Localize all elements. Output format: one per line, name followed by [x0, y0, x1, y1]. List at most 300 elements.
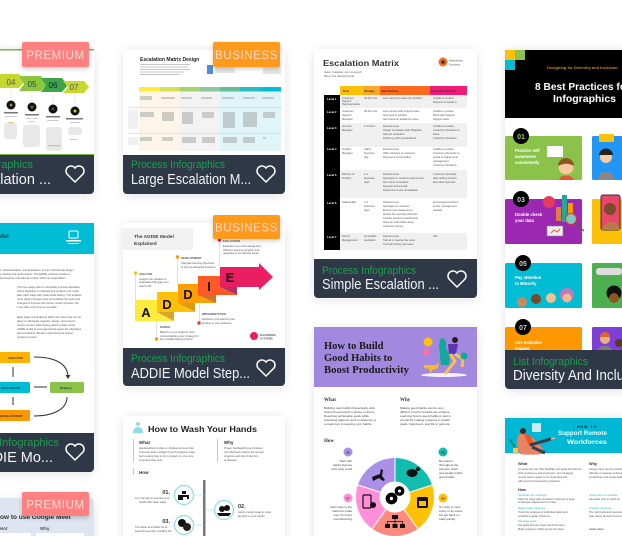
- what and why: will help companies achieve: [589, 471, 622, 475]
- stage labels: IMPLEMENTATION: [202, 312, 226, 316]
- escalation table: Review issue: [383, 172, 399, 176]
- card: premium bottom left: ow to use Google Meet: [0, 514, 72, 521]
- chevron steps: 05: [28, 80, 37, 89]
- what and why: Handwashing is often a mindless process that: [139, 446, 194, 450]
- escalation table: Request to speak to: [433, 100, 457, 104]
- escalation table: needed: [433, 208, 442, 212]
- escalation table: Contact account coordinators: [383, 216, 419, 220]
- badge: business: [213, 42, 280, 67]
- card: how to wash your hands: How to Wash Your Hands: [148, 424, 257, 434]
- escalation table: Work with Support: [433, 113, 455, 117]
- card: how to wash your hands: [123, 416, 285, 536]
- escalation table: 1-3: [364, 200, 368, 204]
- escalation table: Customer threatens to: [433, 128, 460, 132]
- model text: e training and performance. The ADDIE method provides a: [0, 272, 70, 276]
- what and why: Set aside time to catch up: [589, 497, 620, 501]
- card: ADDIE model steps: [123, 223, 285, 387]
- badge: premium: [22, 492, 89, 516]
- card: build good habits: Boost Productivity: [324, 365, 410, 376]
- card: ADDIE model left: del: [0, 234, 9, 240]
- step markers: [344, 448, 448, 502]
- icon: soap: [133, 422, 143, 433]
- escalation table: with raising concern: [433, 176, 457, 180]
- stage labels: effective learning program that: [223, 248, 260, 252]
- escalation table: Director of: [342, 172, 355, 176]
- card: support remote workforces: [505, 418, 622, 536]
- footer: Process Infographics: [131, 353, 225, 365]
- footer: [123, 348, 285, 386]
- what and why: Set goals that are clear and fit the team.: [518, 523, 566, 527]
- logo: Solutions: [449, 62, 461, 66]
- ADDIE staircase arrow: D: [162, 297, 172, 312]
- stage labels: Evaluate if you have designed a: [223, 244, 262, 248]
- escalation table: Consider hiring new team: [383, 242, 414, 246]
- step text: Be patient: [439, 459, 453, 463]
- tile 03: 03: [517, 197, 525, 204]
- escalation table: Timings: [364, 89, 375, 93]
- what and why: How: [324, 439, 334, 444]
- card: support remote workforces: Workforces: [567, 439, 607, 446]
- what and why: How: [139, 470, 149, 475]
- steps timeline: Turn the tap on and wet your: [135, 496, 169, 500]
- tile 05: Pay attention: [515, 275, 542, 280]
- escalation table: Support: [342, 113, 352, 117]
- step text: but get back on: [439, 513, 460, 517]
- escalation table: Senior: [342, 234, 350, 238]
- card: simple escalation matrix: [314, 49, 477, 299]
- what and why: Proper handwashing techniques: [224, 446, 263, 450]
- chevron steps: 07: [70, 83, 79, 92]
- footer: List Infographics: [513, 356, 588, 368]
- badge: premium: PREMIUM: [26, 500, 85, 512]
- what and why: or disease.: [224, 458, 237, 462]
- model text: changes to improve the course content process, but: [17, 301, 79, 305]
- escalation table: Level 5: [327, 173, 337, 177]
- what and why: goals, happiness, and life in general.: [400, 422, 450, 426]
- model text: after each stage with small-scale testing. This enables: [17, 293, 82, 297]
- escalation table: Ensure new measures to: [383, 208, 413, 212]
- escalation table: senior management: [433, 204, 457, 208]
- escalation table: Apologize to customer and ensure: [383, 176, 424, 180]
- step text: habits that are: [333, 463, 352, 467]
- steps timeline: all parts of your hands.: [238, 514, 265, 518]
- what and why: Why: [400, 398, 411, 403]
- tile 08: [592, 327, 622, 357]
- stage labels: DEVELOPMENT: [181, 256, 202, 260]
- stage labels: ANALYSIS: [139, 272, 153, 276]
- steps timeline: hands with clean water.: [139, 500, 167, 504]
- flow diagram: EVALUATION: [1, 386, 20, 390]
- what and why: crucial for making progress in health,: [400, 418, 451, 422]
- step markers: 01: [346, 450, 350, 454]
- tile 07: 07: [519, 325, 527, 332]
- tile 01: [505, 128, 582, 180]
- ADDIE staircase arrow: I: [207, 279, 211, 294]
- illustration: runner: [421, 337, 468, 377]
- model text: taken to effectively organize, design, and present: [17, 319, 76, 323]
- step text: sure it's never: [333, 513, 352, 517]
- card: simple escalation matrix: Escalation Matrix: [323, 59, 400, 68]
- step text: Add notes to the: [330, 505, 352, 509]
- escalation table: Request second call: [383, 184, 408, 188]
- icon: gears: [388, 488, 403, 502]
- what and why: Learning how to keep habits in tact is: [400, 414, 451, 418]
- tile 07: images: [515, 346, 530, 351]
- card: simple escalation matrix: files to the desired format: [324, 74, 354, 78]
- what and why: What: [139, 440, 150, 445]
- step text: throughout the: [439, 463, 459, 467]
- escalation table: resolution: [364, 238, 376, 242]
- escalation table: Customer persisted: [433, 172, 457, 176]
- tile 02: [592, 134, 622, 180]
- escalation table: Talk all to resolve the issue: [383, 238, 416, 242]
- stage labels: understand the gaps you: [139, 280, 169, 284]
- what and why: both employees and employers, but managing: [518, 471, 574, 475]
- model text: where feedback is collected and revisions are made: [17, 289, 79, 293]
- escalation table: Offer solutions to customer: [383, 151, 415, 155]
- logo: [250, 332, 276, 340]
- card: large escalation matrix: [123, 50, 285, 194]
- step text: track quickly: [439, 517, 456, 521]
- escalation table: Customer: [342, 109, 354, 113]
- flow diagram: DEVELOPMENT: [0, 414, 23, 418]
- card: support remote workforces: HOW TO: [577, 425, 597, 429]
- escalation table: Stakeholder: [342, 200, 356, 204]
- escalation table: [324, 86, 467, 250]
- stage labels: DESIGN: [160, 325, 170, 329]
- model text: The Five stage path to continually improve education: [17, 285, 80, 289]
- card: large escalation matrix: Escalation Matrix Design: [140, 57, 199, 63]
- tile 01: Practice self: [515, 148, 540, 153]
- card: premium bottom left: [0, 498, 94, 536]
- escalation table: business: [364, 204, 375, 208]
- escalation table: Customer: [342, 96, 354, 100]
- escalation table: day: [364, 155, 369, 159]
- escalation table: 30-45 mins: [364, 109, 378, 113]
- stage labels: to the pre-designed structure: [181, 265, 216, 269]
- escalation table: Review issue: [383, 147, 399, 151]
- logo: Networking: [449, 58, 463, 62]
- card: diversity and inclusion: Infographics: [553, 93, 616, 105]
- what and why: [518, 462, 622, 531]
- escalation table: Customer threatens: [433, 163, 457, 167]
- stage labels: Integrate learning objectives: [181, 261, 215, 265]
- what and why: How: [518, 488, 526, 492]
- escalation table: Review issue: [383, 234, 399, 238]
- badge: premium: [22, 42, 89, 67]
- footer: [0, 154, 94, 194]
- escalation table: Unable to resolve: [433, 96, 454, 100]
- model text: and constraints will aid in optimizing the course: [17, 331, 74, 335]
- steps timeline: 02.: [238, 504, 246, 510]
- escalation table: Level 2: [327, 110, 337, 114]
- step text: [330, 459, 463, 521]
- escalation table: Half a: [364, 147, 372, 151]
- escalation table: Product: [342, 147, 352, 151]
- escalation table: Executive Sponsor: [433, 180, 456, 184]
- escalation table: Level 6: [327, 201, 337, 205]
- what and why: schedule regular check-ins.: [518, 514, 551, 518]
- steps timeline: least 20 seconds, including the: [135, 529, 172, 533]
- what and why: A remote job can offer flexibility and great benefits for: [518, 467, 581, 471]
- flow diagram: Delivery: [60, 386, 72, 390]
- timeline markers: [6, 90, 80, 116]
- what and why: Why: [589, 462, 598, 466]
- footer: [505, 350, 622, 389]
- escalation table: Support: [342, 99, 352, 103]
- ADDIE staircase arrow: D: [183, 287, 193, 302]
- step text: Start with: [339, 459, 352, 463]
- segment icons: [363, 467, 428, 528]
- step text: a day or an event,: [439, 509, 463, 513]
- escalation table: Manager: [342, 151, 353, 155]
- footer: Large Escalation M...: [131, 172, 251, 188]
- card: support remote workforces: Support Remote: [558, 430, 607, 437]
- escalation table: customer journey: [383, 224, 404, 228]
- stage labels: product to your audience: [202, 321, 232, 325]
- steps timeline: [135, 480, 271, 536]
- what and why: remote teams needs to be organized and: [518, 475, 568, 479]
- badge: premium: PREMIUM: [26, 50, 85, 62]
- ADDIE staircase arrow: A: [141, 305, 151, 320]
- what and why: difficult, but the benefits are endless.: [400, 410, 450, 414]
- escalation table: speak to higher-level: [433, 155, 458, 159]
- card: build good habits: [314, 327, 477, 536]
- what and why: important than ever.: [139, 458, 163, 462]
- escalation table: Immediate: [364, 234, 377, 238]
- chevron steps: [0, 74, 89, 93]
- tile 05: 05: [519, 261, 527, 268]
- escalation table: Account: [342, 124, 352, 128]
- flow diagram: [0, 352, 84, 421]
- tile 04: [592, 195, 622, 244]
- escalation table: Document conversation: [383, 155, 412, 159]
- stage labels: Based on your analysis, start: [160, 330, 195, 334]
- illustration: person with laptop: [509, 423, 555, 455]
- escalation table: Ideal Method: [381, 89, 398, 93]
- what and why: employees aligned and on track.: [518, 500, 557, 504]
- escalation table: days: [364, 208, 370, 212]
- badge: business: [213, 215, 280, 239]
- matrix table: [128, 87, 281, 151]
- tile 07: Use Inclusive: [515, 340, 542, 345]
- card: simple escalation matrix: Issue: Customer can not export: [324, 70, 362, 74]
- step text: habit but make: [332, 509, 352, 513]
- escalation table: leave: [433, 132, 440, 136]
- badge: business: BUSINESS: [215, 50, 278, 62]
- what and why: Making good habits can be very: [400, 406, 444, 410]
- escalation table: Manager: [342, 117, 353, 121]
- what and why: Start the week with consistent meetings to keep: [518, 497, 575, 501]
- model text: course content. Determining which version of the: [17, 323, 76, 327]
- what and why: with good communication practices.: [518, 479, 561, 483]
- card: ADDIE model steps: Explained: [134, 241, 157, 247]
- what and why: Reaching achievable goals while: [324, 414, 369, 418]
- footer: ADDIE Model Step...: [131, 366, 250, 382]
- card: ADDIE model left: [0, 223, 94, 472]
- footer: [0, 433, 94, 472]
- model text: it can take more time to complete.: [17, 305, 58, 309]
- step markers: 03: [441, 450, 445, 454]
- escalation table: days: [364, 180, 370, 184]
- tile 05: to Minority: [515, 281, 537, 286]
- step text: extremely small: [331, 467, 352, 471]
- what and why: practicing patience and consistency is: [324, 418, 376, 422]
- tile 05: [505, 255, 582, 308]
- model text: s, implementation, and Evaluation. It is an instructional design: [0, 268, 74, 272]
- step markers: 07: [346, 496, 350, 500]
- escalation table: Customer demands to: [433, 151, 460, 155]
- escalation table: their issue is handled: [383, 180, 409, 184]
- card: diversity and inclusion: [505, 50, 622, 389]
- card: ADDIE model steps: The ADDIE Model: [134, 234, 174, 240]
- card: premium bottom left: Why: [40, 526, 50, 531]
- stage labels: want to fill: [139, 284, 151, 288]
- logo: SYSTEMS: [260, 336, 273, 340]
- what and why: [324, 398, 451, 444]
- what and why: Provide resources: [589, 506, 612, 510]
- what and why: everyone does multiple times throughout a day,: [139, 450, 196, 454]
- pie diagram: [330, 448, 463, 536]
- escalation table: 1-2: [364, 172, 368, 176]
- model text: Each stage is intended to define the steps that can be: [17, 315, 81, 319]
- footer: Simple Escalation ...: [322, 277, 439, 293]
- escalation table: Review issue: [383, 124, 399, 128]
- escalation table: Unable to resolve: [433, 147, 454, 151]
- steps timeline: 01.: [162, 490, 170, 496]
- escalation table: Level 1: [327, 97, 337, 101]
- escalation table: and input of solution: [383, 113, 408, 117]
- escalation table: Follow up with personalized: [383, 136, 417, 140]
- what and why: Better tasks check-ins: [518, 506, 546, 510]
- stage labels: [134, 238, 262, 341]
- escalation table: Live support with support team: [383, 109, 420, 113]
- what and why: but knowing how to do it properly is now more: [139, 454, 194, 458]
- escalation table: Unable to resolve: [433, 109, 454, 113]
- escalation table: Manager: [342, 128, 353, 132]
- tile 01: consistently: [515, 160, 540, 165]
- ADDIE staircase arrow: [135, 263, 273, 321]
- flow diagram: ANALYSIS: [8, 356, 23, 360]
- escalation table: protect the security protocols: [383, 212, 418, 216]
- stage labels: EVALUATION: [223, 239, 240, 243]
- logo: [438, 58, 463, 66]
- footer: Process Infographics: [131, 159, 225, 171]
- stage labels: Distribute your learning tool: [202, 317, 235, 321]
- model text: and improve educational content within an organization.: [0, 276, 67, 280]
- tile 03: your data: [515, 218, 535, 223]
- tile 03: [505, 191, 584, 244]
- escalation table: Attempt resolution: [383, 132, 405, 136]
- escalation table: Apologize to customer: [383, 204, 410, 208]
- stage labels: Analyze the situation to: [139, 277, 167, 281]
- step text: process. Slow: [439, 467, 459, 471]
- escalation table: Level 4: [327, 147, 337, 151]
- what and why: Track the progress of individual tasks and: [518, 510, 568, 514]
- what and why: around beyond just a phase or trend.: [324, 410, 375, 414]
- tile 01: awareness: [515, 154, 537, 159]
- escalation table: Role: [343, 89, 350, 93]
- logo: ELEARNING: [260, 333, 276, 337]
- step text: good habits: [439, 475, 455, 479]
- badge: business: BUSINESS: [215, 222, 278, 234]
- tile 01: 01: [517, 134, 525, 141]
- escalation table: Escalation Method: [431, 89, 456, 93]
- what and why: Building new habits that actually stick: [324, 406, 376, 410]
- stage labels: the possible learning topics: [160, 337, 193, 341]
- chevron steps: 04: [7, 78, 16, 87]
- escalation table: Support team: [433, 117, 450, 121]
- matrix intro: [140, 64, 281, 75]
- footer: [314, 259, 477, 298]
- escalation table: Determine if new remediation: [383, 188, 418, 192]
- escalation table: Get customer details for issue: [383, 117, 419, 121]
- card: escalation chevrons: [0, 49, 94, 194]
- footer: Process Infographics: [322, 265, 416, 277]
- what and why: Leave time for updates: [589, 493, 618, 497]
- what and why: Why: [224, 440, 234, 445]
- model text: creation process.: [17, 335, 38, 339]
- escalation table: Unable to resolve: [433, 124, 454, 128]
- escalation table: Have an informative deep: [383, 220, 414, 224]
- logo: [66, 231, 81, 244]
- step text: overwhelming: [333, 517, 352, 521]
- escalation table: Live support to solve the problem: [383, 96, 423, 100]
- what and why: Schedule set meetings: [518, 493, 547, 497]
- card: premium bottom left: Hot: [0, 526, 8, 531]
- escalation table: Product: [342, 176, 352, 180]
- stage labels: upgrades in the desired areas: [223, 251, 259, 255]
- escalation table: Representative: [342, 102, 361, 106]
- what and why: can effectively reduce the spread: [224, 450, 264, 454]
- escalation table: N/A: [433, 234, 438, 238]
- what and why: a major key to keeping your habits.: [324, 422, 372, 426]
- escalation table: Level 3: [327, 126, 337, 130]
- steps timeline: Apply enough soap to cover: [238, 510, 271, 514]
- tile 06: [592, 263, 622, 308]
- chevron steps: 06: [49, 81, 58, 90]
- card: build good habits: Good Habits to: [324, 353, 392, 364]
- model text: more rapid prototype tests and enables the team and: [17, 297, 81, 301]
- what and why: What: [324, 398, 336, 403]
- stage labels: conceptualizing your strategy for: [160, 334, 199, 338]
- escalation table: Assign immediate task Mitigation: [383, 128, 423, 132]
- steps timeline: The lather and hands for at: [135, 525, 168, 529]
- escalation table: business: [364, 151, 375, 155]
- ADDIE staircase arrow: E: [226, 270, 235, 285]
- what and why: What: [518, 462, 528, 466]
- step descriptions: [4, 112, 83, 151]
- escalation table: Review issue: [383, 200, 399, 204]
- step text: It's okay to miss: [439, 505, 461, 509]
- escalation table: 1-2 hours: [364, 124, 376, 128]
- escalation table: business: [364, 176, 375, 180]
- escalation table: Management: [342, 238, 358, 242]
- escalation table: Level 7: [327, 235, 337, 239]
- footer: [123, 155, 285, 194]
- tile 03: Double check: [515, 212, 543, 217]
- escalation table: Customer threatens: [433, 136, 457, 140]
- escalation table: management: [433, 159, 449, 163]
- tile 07: [505, 319, 582, 357]
- card: build good habits: How to Build: [324, 341, 384, 352]
- escalation table: 30-45 mins: [364, 96, 378, 100]
- steps timeline: 03.: [162, 519, 170, 525]
- what and why: Set clear goals: [518, 519, 537, 523]
- step markers: 04: [441, 496, 445, 500]
- what and why: Learn more: [589, 527, 604, 531]
- what and why: Make progress visible across the team.: [518, 527, 565, 531]
